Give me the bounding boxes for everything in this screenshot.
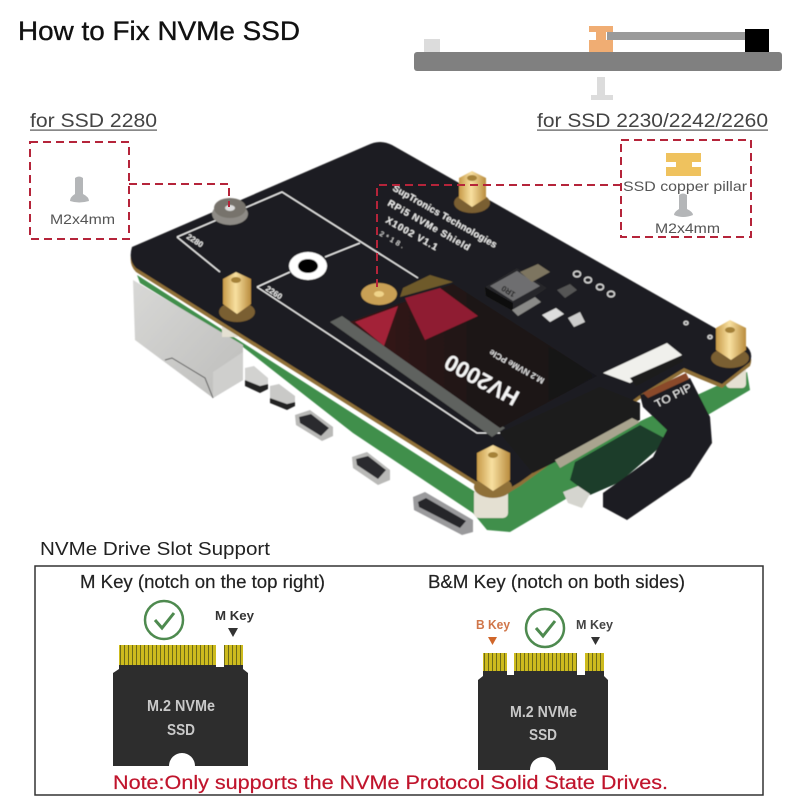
M Key marker: M Key: [215, 608, 255, 623]
lower standoffs: [222, 315, 746, 518]
silkscreen outlines: [177, 192, 500, 433]
dark components under connector: [570, 425, 668, 495]
title: How to Fix NVMe SSD: [18, 16, 300, 46]
icon: green check: [145, 601, 183, 639]
B&M Key heading: B&M Key (notch on both sides): [428, 571, 685, 592]
board maker text: X1002 V1.1: [384, 215, 440, 254]
SSD caption line 2: SSD: [167, 722, 195, 739]
board maker text: SupTronics Technologies: [391, 183, 499, 251]
board maker text: RPi5 NVMe Shield: [386, 198, 472, 253]
SSD caption line 2: SSD: [529, 727, 557, 744]
white FPC connector: [603, 343, 683, 386]
M.2 connector slot: [500, 387, 640, 473]
mounting hole: [289, 252, 327, 280]
callout: copper pillar and screw for shorter SSDs: [377, 140, 751, 290]
silkscreen size labels: [185, 232, 284, 302]
board maker text: 2*18.: [378, 231, 405, 250]
product photo: SSD shield board on Raspberry Pi: [131, 142, 751, 535]
brass standoffs: [219, 171, 749, 498]
M Key marker: [215, 608, 255, 637]
heading: for SSD 2230/2242/2260: for SSD 2230/2242/2260: [537, 111, 768, 132]
M Key marker: M Key: [576, 617, 614, 632]
screw size label: M2x4mm: [655, 220, 720, 236]
SSD caption: M.2 NVMe: [510, 704, 577, 721]
note: Note:Only supports the NVMe Protocol Solid State Drives.: [113, 773, 668, 794]
icon: green check: [526, 609, 564, 647]
ethernet port: [133, 280, 243, 398]
silver part under board: [563, 486, 590, 508]
M Key heading: M Key (notch on the top right): [80, 571, 325, 592]
screw size label: M2x4mm: [50, 211, 115, 227]
B Key marker: [476, 617, 511, 645]
callout: M2x4mm screw for 2280: [30, 142, 229, 239]
inductor and components: [485, 264, 585, 327]
B&M key SSD diagram: [478, 653, 608, 770]
board edge: [131, 146, 751, 497]
icon: screw: [674, 194, 693, 217]
SSD label text: HV2000: [440, 349, 523, 410]
silkscreen size labels: 2280: [185, 232, 205, 250]
USB and HDMI ports: [245, 366, 473, 535]
flat ribbon cable with TO PIP label: [603, 373, 712, 520]
flat ribbon cable with TO PIP label: TO PIP: [653, 382, 694, 411]
silkscreen size labels: 2260: [264, 284, 284, 302]
four through holes: [574, 271, 712, 339]
panel: drive slot support: [35, 566, 763, 795]
inductor and components: 1R0: [499, 283, 517, 299]
SSD label subtitle: M.2 NVMe PCIe: [487, 347, 546, 386]
heading: for SSD 2280: for SSD 2280: [30, 111, 157, 132]
mounting side-view diagram: [414, 26, 782, 100]
black shield board: [131, 142, 751, 493]
pillar label: SSD copper pillar: [623, 178, 747, 194]
icon: screw: [70, 176, 89, 202]
M key SSD diagram: [113, 645, 248, 766]
M.2 SSD: [330, 275, 597, 437]
green Raspberry Pi PCB: [137, 275, 750, 532]
SSD caption: M.2 NVMe: [147, 698, 215, 715]
steel screw on board: [212, 198, 248, 225]
icon: copper pillar: [666, 153, 701, 176]
heading: NVMe Drive Slot Support: NVMe Drive Slot Support: [40, 538, 270, 559]
B Key marker: B Key: [476, 617, 511, 632]
M Key marker: [576, 617, 614, 645]
